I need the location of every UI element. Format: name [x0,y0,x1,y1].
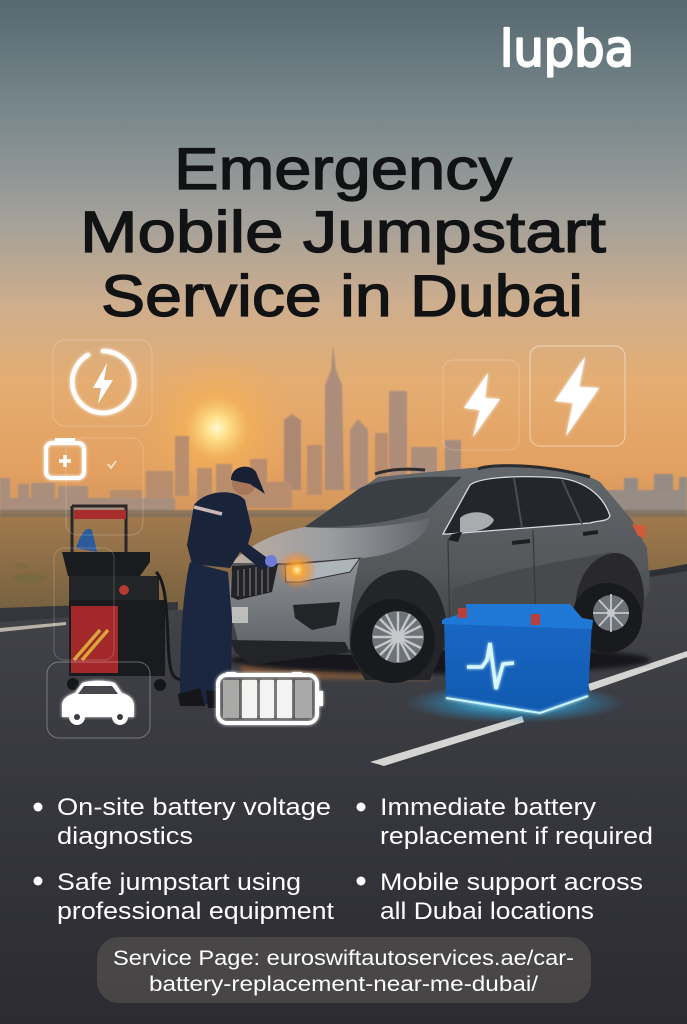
icon card: medical battery [46,438,143,535]
bullet: safe jumpstart [34,869,334,925]
bullet: on-site diagnostics: diagnostics [57,823,193,850]
grille [231,564,278,600]
title: Emergency [174,137,512,202]
title: Service in Dubai [101,264,583,329]
bullet: immediate replacement: Immediate battery [380,794,596,821]
jump-start cart [62,506,190,691]
car hood [232,518,430,563]
rear wheel [572,553,644,653]
bullet: immediate replacement: replacement if required [380,823,653,850]
icon card: charging ring [53,340,152,426]
feature list [34,794,653,925]
front bumper [228,558,360,650]
sun [137,348,297,508]
city skyline [0,345,687,518]
bullet: safe jumpstart: professional equipment [57,898,334,925]
battery pulse icon [467,643,514,689]
title: Mobile Jumpstart [80,200,606,265]
headlight glow [277,550,317,590]
bullet: mobile support: Mobile support across [380,869,643,896]
bullet: mobile support [356,869,643,925]
headlight [285,558,360,582]
bullet: mobile support: all Dubai locations [380,898,594,925]
logo: lupba [500,20,634,78]
mirror [460,512,494,532]
car body [228,467,650,655]
title [80,137,606,329]
technician [178,467,277,708]
roof rails [375,466,590,477]
tail light [632,524,646,538]
side windows [443,477,610,534]
front bumper intake [293,602,340,630]
desert ground [0,510,687,614]
icon card: lightning bolt large [530,346,625,446]
service page pill [97,937,591,1003]
door lower reflection [452,552,625,645]
battery glow [405,683,625,723]
road [0,564,687,1024]
car [228,466,650,683]
service page pill: Service Page: euroswiftautoservices.ae/car- [113,947,574,970]
front wheel [350,570,447,683]
battery [405,604,625,723]
bullet: immediate replacement [356,794,653,850]
service page pill: battery-replacement-near-me-dubai/ [149,973,538,996]
windshield [305,477,462,527]
door handles [512,532,598,543]
icon card: lightning bolt small [443,360,519,450]
bullet: on-site diagnostics [34,794,331,850]
background: sky [0,0,687,530]
icon: battery level [218,672,323,723]
icon card: empty outline [54,548,114,660]
bullet: safe jumpstart: Safe jumpstart using [57,869,301,896]
icon card: car [47,662,150,738]
bullet: on-site diagnostics: On-site battery voltage [57,794,331,821]
